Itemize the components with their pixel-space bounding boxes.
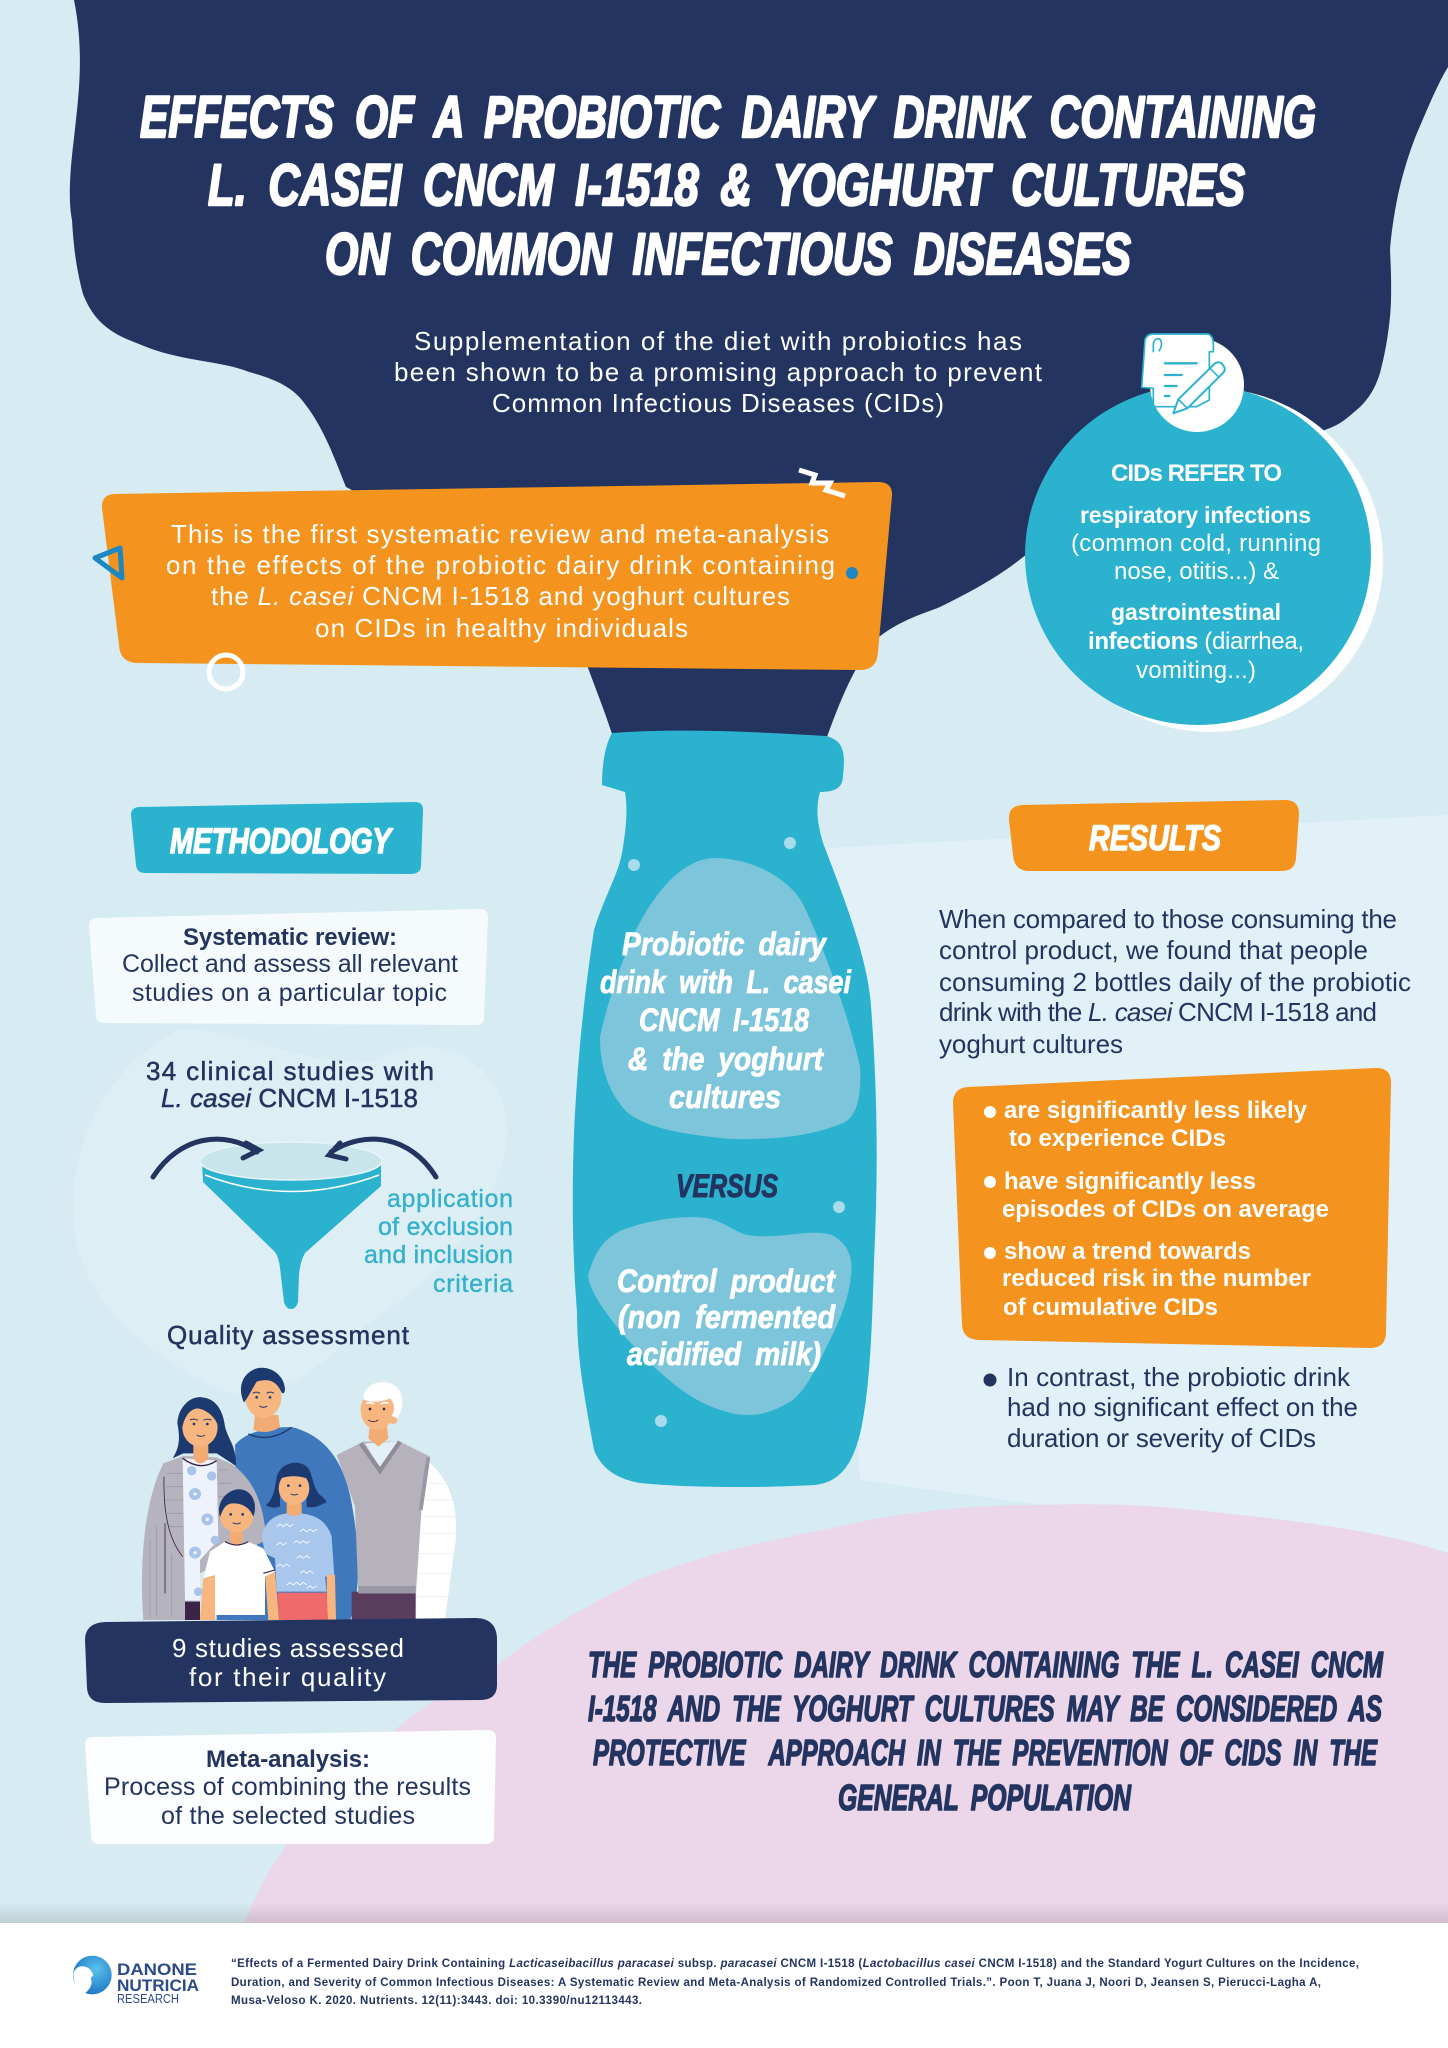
callout: first systematic review: on the effects of the probiotic dairy drink containing <box>166 550 835 580</box>
text: results intro: When compared to those consuming the <box>939 904 1397 934</box>
control product label <box>617 1263 836 1372</box>
icon: ring <box>209 655 243 689</box>
conclusion: GENERAL POPULATION <box>838 1777 1132 1818</box>
intro text: Common Infectious Diseases (CIDs) <box>492 388 944 418</box>
text: exclusion criteria: and inclusion <box>364 1241 513 1269</box>
icon: triangle <box>95 548 122 578</box>
intro text: Supplementation of the diet with probiotics has <box>414 326 1022 356</box>
man <box>235 1368 358 1620</box>
text: in contrast: duration or severity of CIDs <box>1007 1423 1316 1453</box>
text: 34 clinical studies: 34 clinical studies with <box>146 1056 434 1086</box>
probiotic drink label: cultures <box>669 1079 781 1115</box>
title <box>140 85 1316 287</box>
control product label: acidified milk) <box>627 1336 821 1372</box>
text: results intro <box>939 904 1411 1059</box>
box: meta-analysis: of the selected studies <box>161 1802 415 1830</box>
probiotic drink label: & the yoghurt <box>628 1041 824 1077</box>
probiotic drink label <box>600 926 852 1115</box>
text: exclusion criteria: criteria <box>433 1270 513 1298</box>
callout: first systematic review: This is the first systematic review and meta-analysis <box>171 519 829 549</box>
pink bottom shape <box>244 1504 1448 1925</box>
navy header blob <box>70 0 1448 740</box>
title: ON COMMON INFECTIOUS DISEASES <box>325 222 1131 287</box>
illustration: family <box>142 1368 457 1620</box>
panel: CIDs refer to: infections (diarrhea, <box>1088 628 1304 655</box>
text: exclusion criteria: application <box>387 1185 513 1213</box>
pale blob behind methodology <box>73 1030 507 1400</box>
callout: first systematic review <box>95 470 892 689</box>
control product label: Control product <box>617 1263 836 1299</box>
logo: RESEARCH <box>117 1991 179 2006</box>
text: 34 clinical studies <box>146 1056 434 1113</box>
citation: Musa-Veloso K. 2020. Nutrients. 12(11):3443. doi: 10.3390/nu12113443. <box>231 1995 642 2007</box>
text: results intro: control product, we found that people <box>939 935 1368 965</box>
panel: CIDs refer to <box>1025 334 1383 732</box>
heading: results: RESULTS <box>1089 819 1221 858</box>
probiotic drink label: CNCM I-1518 <box>639 1002 809 1038</box>
logo: DANONE <box>117 1960 197 1979</box>
box: meta-analysis <box>85 1730 496 1844</box>
icon: notepad and pencil <box>1142 334 1244 432</box>
text: results intro: yoghurt cultures <box>939 1029 1123 1059</box>
probiotic drink label: drink with L. casei <box>600 964 852 1000</box>
text: in contrast <box>984 1362 1358 1453</box>
panel: CIDs refer to: nose, otitis...) & <box>1114 558 1279 585</box>
panel: CIDs refer to: vomiting...) <box>1136 657 1256 684</box>
footer <box>0 1903 1448 2048</box>
versus: VERSUS <box>676 1168 779 1204</box>
woman <box>142 1397 267 1620</box>
panel: results findings: reduced risk in the number <box>1002 1265 1311 1292</box>
text: results intro: drink with the L. casei CNCM I-1518 and <box>939 997 1377 1027</box>
boy <box>200 1489 279 1620</box>
panel: results findings: episodes of CIDs on average <box>1002 1196 1329 1223</box>
box: systematic review: Systematic review: <box>183 924 397 951</box>
box: 9 studies assessed: for their quality <box>189 1662 386 1692</box>
bubbles <box>628 837 845 1427</box>
panel: CIDs refer to: (common cold, running <box>1071 530 1321 557</box>
panel: results findings: to experience CIDs <box>1009 1125 1226 1152</box>
panel: results findings <box>953 1068 1391 1348</box>
heading: methodology <box>131 802 423 874</box>
panel: results findings: of cumulative CIDs <box>1003 1294 1218 1321</box>
citation: “Effects of a Fermented Dairy Drink Containing Lacticaseibacillus paracasei subsp. paracasei CNCM I-1518 (Lactobacillus casei CNCM I-1518) and the Standard Yogurt Cultures on the Incidence, <box>231 1958 1359 1970</box>
probiotic drink label: Probiotic dairy <box>622 926 828 962</box>
icon: funnel <box>153 1139 436 1309</box>
panel: CIDs refer to: CIDs REFER TO <box>1111 460 1282 487</box>
conclusion <box>588 1644 1384 1818</box>
text: 34 clinical studies: L. casei CNCM I-1518 <box>161 1083 418 1113</box>
bottle <box>573 731 877 1487</box>
box: 9 studies assessed: 9 studies assessed <box>172 1633 404 1663</box>
panel: results findings: are significantly less likely <box>1004 1097 1308 1124</box>
box: 9 studies assessed <box>85 1618 497 1703</box>
intro text <box>394 326 1043 418</box>
panel: CIDs refer to: respiratory infections <box>1080 502 1311 528</box>
text: results intro: consuming 2 bottles daily of the probiotic <box>939 967 1411 997</box>
text: in contrast: In contrast, the probiotic drink <box>1007 1362 1351 1392</box>
text: exclusion criteria <box>364 1185 513 1298</box>
heading: results <box>1009 800 1299 871</box>
callout: first systematic review: the L. casei CNCM I-1518 and yoghurt cultures <box>211 581 790 611</box>
icon: dot <box>846 567 858 579</box>
grandfather <box>337 1382 457 1620</box>
logo <box>73 1956 199 2006</box>
control product label: (non fermented <box>618 1299 836 1335</box>
citation <box>231 1958 1359 2007</box>
girl <box>262 1463 336 1620</box>
results background panel <box>826 815 1448 1560</box>
box: systematic review: studies on a particular topic <box>132 979 447 1007</box>
callout: first systematic review: on CIDs in healthy individuals <box>315 613 688 643</box>
box: systematic review: Collect and assess all relevant <box>122 950 458 978</box>
box: systematic review <box>89 909 488 1025</box>
panel: CIDs refer to: gastrointestinal <box>1111 599 1281 625</box>
box: meta-analysis: Meta-analysis: <box>206 1746 370 1773</box>
icon: zigzag <box>799 470 845 496</box>
blob: control product <box>588 1217 852 1415</box>
citation: Duration, and Severity of Common Infectious Diseases: A Systematic Review and Meta-Analysis of Randomized Controlled Trials.”. Poon T, Juana J, Noori D, Jeansen S, Pierucci-Lagha A, <box>231 1977 1321 1989</box>
intro text: been shown to be a promising approach to prevent <box>394 357 1043 387</box>
text: exclusion criteria: of exclusion <box>378 1213 513 1241</box>
logo: NUTRICIA <box>117 1976 199 1995</box>
box: meta-analysis: Process of combining the results <box>104 1773 471 1801</box>
heading: methodology: METHODOLOGY <box>170 822 393 861</box>
panel: results findings: have significantly less <box>1004 1168 1256 1195</box>
panel: results findings: show a trend towards <box>1004 1238 1251 1265</box>
blob: probiotic drink <box>600 858 860 1139</box>
text: quality assessment: Quality assessment <box>167 1320 410 1350</box>
text: in contrast: had no significant effect on the <box>1007 1392 1358 1422</box>
arrow right <box>329 1139 436 1177</box>
arrow left <box>153 1139 259 1177</box>
